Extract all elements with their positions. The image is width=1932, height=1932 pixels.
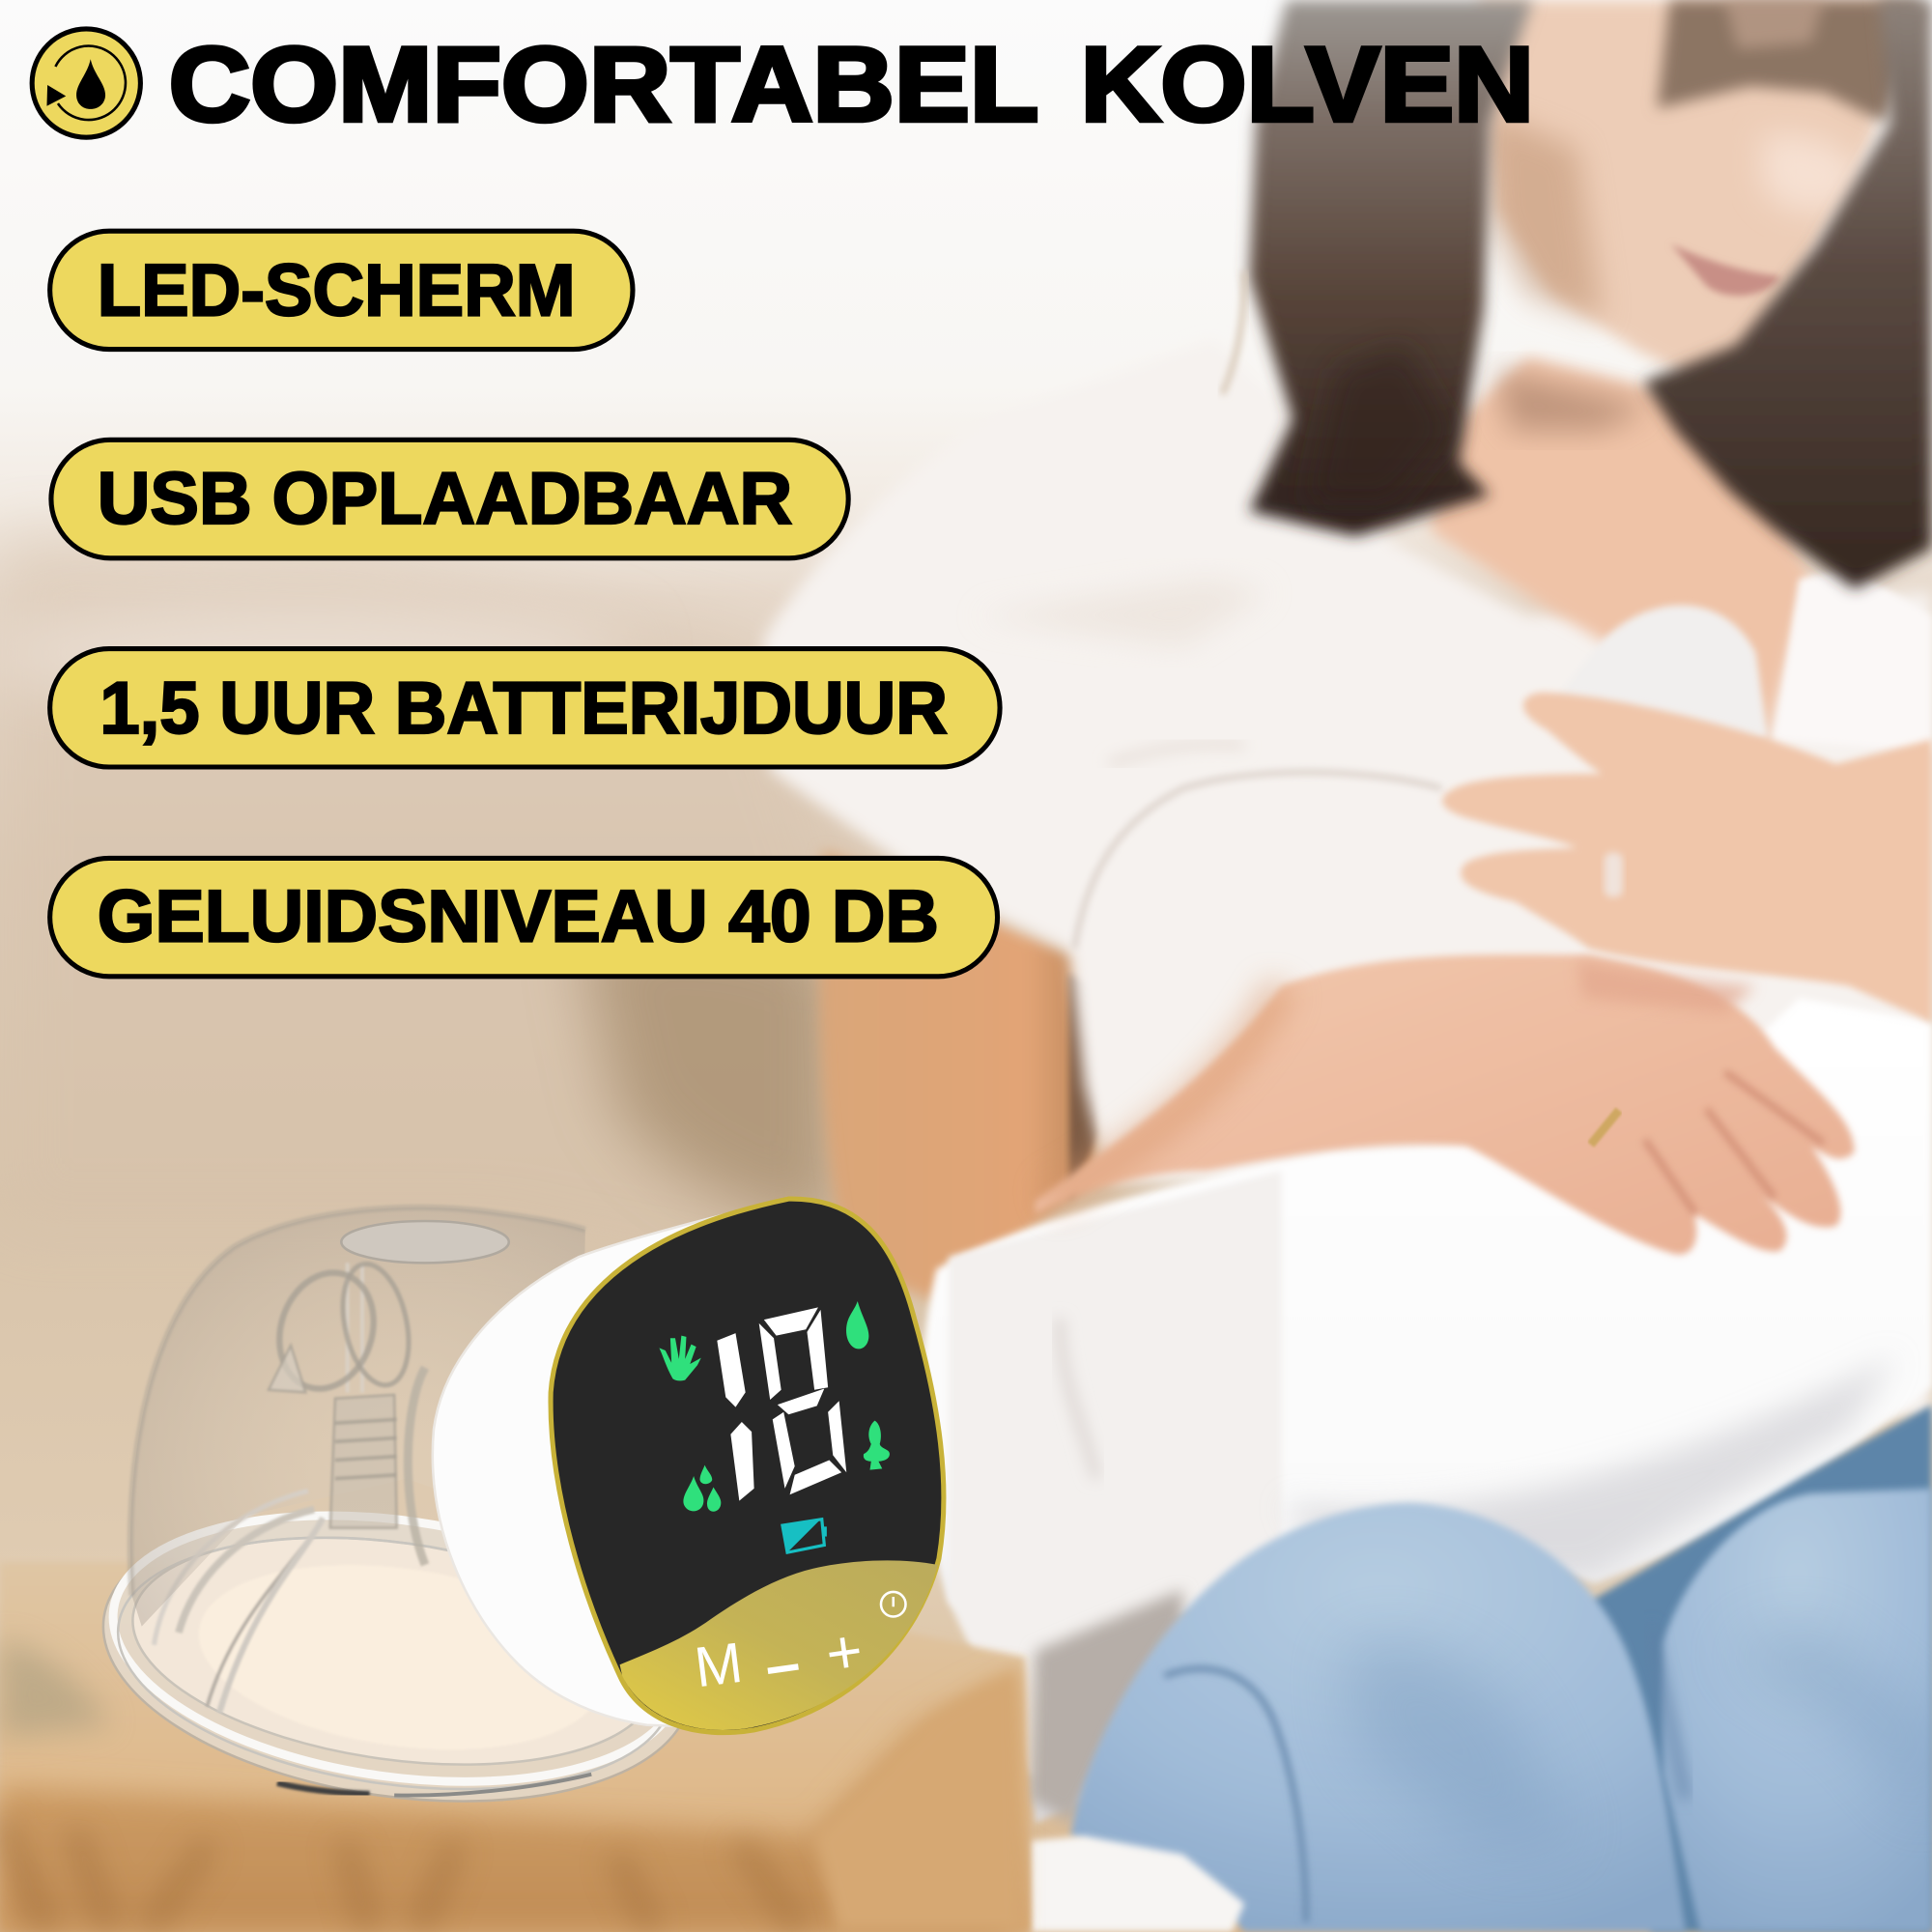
jeans [1070, 1405, 1932, 1932]
pillow and belly [922, 998, 1932, 1824]
inner valve and stem [265, 1258, 425, 1565]
shirt and torso [764, 339, 1932, 1417]
feature pill: led screen: LED-SCHERM [98, 250, 576, 332]
feature pill: usb rechargeable: USB OPLAADBAAR [98, 458, 792, 540]
button labels [692, 1615, 867, 1699]
feature pill: usb rechargeable [51, 440, 848, 558]
gold button strip [620, 1560, 938, 1730]
icon: battery [782, 1520, 827, 1552]
glass base dish [85, 1481, 709, 1836]
feature pill: battery life: 1,5 UUR BATTERIJDUUR [99, 668, 948, 750]
upper hand [1442, 693, 1932, 1023]
sock [1030, 1836, 1244, 1932]
feature pill: led screen [50, 231, 633, 350]
feature pill: noise level: GELUIDSNIVEAU 40 DB [98, 875, 939, 957]
button labels: + [821, 1615, 867, 1689]
title [169, 26, 1534, 144]
wooden side table [0, 1562, 1030, 1932]
transparent dome [130, 1208, 585, 1627]
status icons [659, 1301, 890, 1512]
breast shield flange [154, 1491, 614, 1774]
button labels: M [692, 1632, 746, 1699]
neck and chest skin [1430, 357, 1811, 764]
feature pill: battery life [50, 649, 1000, 767]
icon: bottle [864, 1421, 890, 1470]
icon: three drops [683, 1465, 721, 1512]
icon: large drop [846, 1301, 868, 1349]
icon: yellow circle with drop and cycle arrow [32, 29, 140, 137]
feature pill: noise level [50, 858, 998, 977]
icon: power [881, 1592, 906, 1616]
face [1479, 0, 1891, 384]
title: KOLVEN [1081, 26, 1534, 144]
product: wearable breast pump [85, 1199, 944, 1836]
title: COMFORTABEL [169, 26, 1038, 144]
control panel face [551, 1199, 944, 1733]
icon: hand [659, 1336, 701, 1380]
upper arm [819, 850, 1096, 1306]
forearm and lower hand [1035, 954, 1855, 1255]
hair [1249, 0, 1533, 536]
segment display 18 [717, 1307, 846, 1501]
shirt fold over chest [1552, 605, 1768, 764]
membrane on top of dome [341, 1221, 509, 1263]
white motor housing [433, 1199, 788, 1729]
